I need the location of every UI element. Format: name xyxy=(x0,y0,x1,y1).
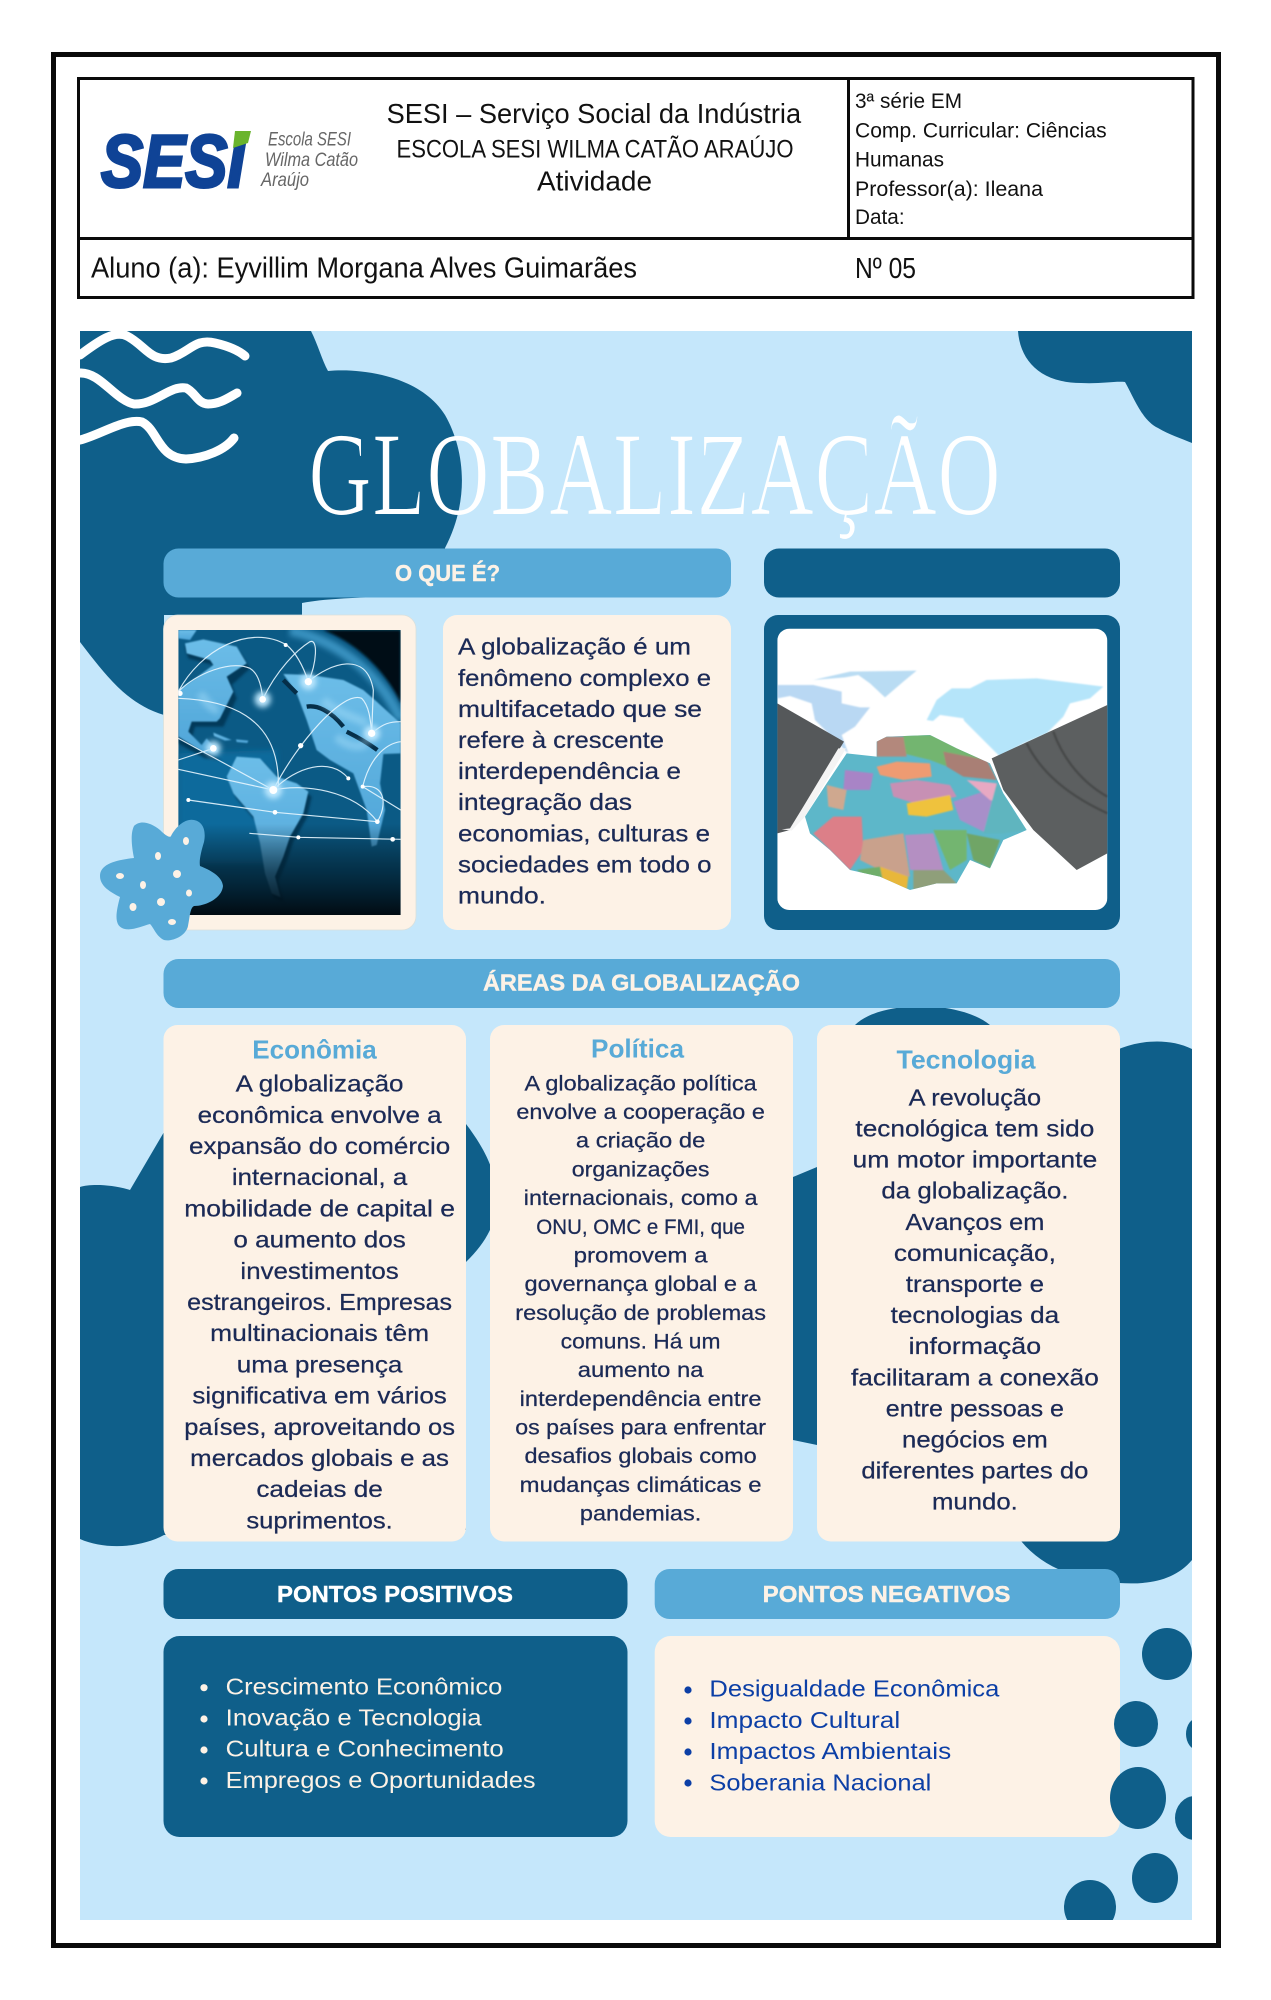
panel: positive points list: Empregos e Oportunidades xyxy=(226,1767,536,1793)
panel: positive points list: Crescimento Econômico xyxy=(226,1673,502,1699)
card text: tecnologia: informação xyxy=(909,1333,1041,1359)
card text: politica: aumento na xyxy=(578,1359,704,1382)
card text: politica: pandemias. xyxy=(580,1502,701,1526)
card text: economia: cadeias de xyxy=(256,1476,383,1502)
card: tecnologia xyxy=(817,1025,1120,1542)
heading: o que é xyxy=(164,548,731,598)
card text: economia: econômica envolve a xyxy=(198,1102,442,1128)
card text: politica: mudanças climáticas e xyxy=(520,1474,761,1497)
heading: pontos negativos: PONTOS NEGATIVOS xyxy=(763,1581,1010,1607)
card text: tecnologia: entre pessoas e xyxy=(886,1395,1064,1421)
card title: politica: Política xyxy=(591,1034,685,1064)
school title: SESI – Serviço Social da Indústria xyxy=(387,98,802,129)
class details: Comp. Curricular: Ciências xyxy=(855,120,1107,143)
panel: negative points list xyxy=(655,1636,1120,1837)
card text: politica: governança global e a xyxy=(524,1273,757,1296)
card text: tecnologia: tecnologias da xyxy=(891,1302,1059,1328)
SESI logo: SESI xyxy=(101,120,246,203)
school title: ESCOLA SESI WILMA CATÃO ARAÚJO xyxy=(396,135,794,164)
heading: pontos positivos xyxy=(164,1569,628,1619)
class details xyxy=(855,90,1107,229)
card text: politica: organizações xyxy=(572,1158,709,1181)
card title: economia: Econômia xyxy=(252,1035,377,1065)
card text: economia: investimentos xyxy=(240,1258,399,1284)
white wave decorations xyxy=(80,334,245,459)
student name: Aluno (a): Eyvillim Morgana Alves Guimarães xyxy=(91,253,637,285)
card: definition text xyxy=(443,615,731,930)
card: definition text: fenômeno complexo e xyxy=(458,665,711,691)
class details: 3ª série EM xyxy=(855,90,962,113)
card text: economia: internacional, a xyxy=(232,1164,407,1190)
card text: politica: A globalização política xyxy=(524,1072,757,1095)
card text: tecnologia: Avanços em xyxy=(905,1209,1044,1235)
card text: politica: comuns. Há um xyxy=(561,1330,720,1353)
card text: tecnologia: tecnológica tem sido xyxy=(855,1116,1094,1142)
card: definition text: sociedades em todo o xyxy=(458,851,712,877)
school title: Atividade xyxy=(537,166,652,197)
card text: tecnologia: facilitaram a conexão xyxy=(851,1364,1099,1390)
title: GLOBALIZAÇÃO xyxy=(308,409,1001,540)
heading: o que é: O QUE É? xyxy=(395,559,500,586)
card text: economia: significativa em vários xyxy=(192,1383,447,1409)
class details: Professor(a): Ileana xyxy=(855,178,1043,201)
card: economia xyxy=(164,1025,466,1542)
card text: tecnologia: um motor importante xyxy=(852,1147,1097,1173)
card text: economia: suprimentos. xyxy=(246,1507,393,1533)
card text: tecnologia: da globalização. xyxy=(881,1178,1068,1204)
card text: economia: mercados globais e as xyxy=(190,1445,449,1471)
panel: negative points list: Impacto Cultural xyxy=(709,1707,900,1733)
student number: Nº 05 xyxy=(855,253,916,285)
class details: Data: xyxy=(855,206,905,229)
card text: tecnologia: negócios em xyxy=(902,1426,1048,1452)
card text: economia: expansão do comércio xyxy=(189,1133,450,1159)
card text: economia: estrangeiros. Empresas xyxy=(187,1289,452,1315)
school title xyxy=(387,98,802,197)
card text: tecnologia xyxy=(851,1084,1099,1515)
card text: politica: resolução de problemas xyxy=(515,1302,766,1325)
SESI logo: Escola SESI xyxy=(268,130,352,150)
heading: áreas da globalização xyxy=(164,959,1120,1008)
card: globe picture xyxy=(164,615,416,930)
decorative dots xyxy=(1064,1628,1192,1920)
card text: economia: países, aproveitando os xyxy=(184,1414,455,1440)
decorative flower xyxy=(100,820,223,940)
card: definition text: interdependência e xyxy=(458,758,681,784)
card text: economia: uma presença xyxy=(237,1351,403,1377)
card text: politica: ONU, OMC e FMI, que xyxy=(536,1216,745,1239)
panel: negative points list: Soberania Nacional xyxy=(709,1769,931,1795)
card text: tecnologia: mundo. xyxy=(932,1489,1018,1515)
card text: politica: a criação de xyxy=(576,1130,705,1153)
heading: pontos negativos xyxy=(655,1569,1120,1619)
panel: negative points list: Desigualdade Econômica xyxy=(709,1676,1000,1702)
card text: economia: multinacionais têm xyxy=(210,1320,429,1346)
class details: Humanas xyxy=(855,149,944,172)
table frame xyxy=(78,78,1193,298)
card text: economia xyxy=(184,1071,455,1533)
card: definition text: A globalização é um xyxy=(458,634,691,660)
panel: positive points list: Inovação e Tecnologia xyxy=(226,1704,482,1730)
card: definition text: integração das xyxy=(458,789,632,815)
panel: positive points list xyxy=(164,1636,628,1837)
image: handshake painted with a world map xyxy=(777,629,1107,910)
school header table xyxy=(78,78,1193,298)
card: definition text: multifacetado que se xyxy=(458,696,702,722)
card text: politica: envolve a cooperação e xyxy=(516,1101,765,1124)
card text: economia: mobilidade de capital e xyxy=(184,1195,455,1221)
card text: politica: os países para enfrentar xyxy=(515,1416,766,1439)
card text: politica: promovem a xyxy=(574,1244,708,1267)
card text: politica: internacionais, como a xyxy=(524,1187,758,1210)
poster panel xyxy=(80,331,1215,1934)
card text: tecnologia: comunicação, xyxy=(894,1240,1056,1266)
card text: tecnologia: transporte e xyxy=(906,1271,1044,1297)
image: digital globe network xyxy=(177,630,401,915)
card text: politica: interdependência entre xyxy=(520,1388,761,1411)
panel: negative points list: Impactos Ambientais xyxy=(709,1738,951,1764)
empty dark heading bar xyxy=(764,548,1120,598)
card: definition text: economias, culturas e xyxy=(458,820,710,846)
card text: economia: A globalização xyxy=(236,1071,404,1097)
card: politica xyxy=(490,1025,793,1542)
card: definition text: mundo. xyxy=(458,882,546,908)
panel background xyxy=(80,331,1192,1920)
card title: tecnologia: Tecnologia xyxy=(896,1045,1036,1075)
SESI logo: Wilma Catão xyxy=(265,150,358,171)
panel: positive points list: Cultura e Conhecimento xyxy=(226,1736,504,1762)
card: handshake picture xyxy=(764,615,1120,930)
card text: politica: desafios globais como xyxy=(524,1445,757,1468)
heading: áreas da globalização: ÁREAS DA GLOBALIZAÇÃO xyxy=(483,969,800,996)
decorative blobs xyxy=(80,331,1192,1583)
card text: politica xyxy=(515,1072,766,1526)
card text: tecnologia: A revolução xyxy=(909,1084,1041,1110)
card: definition text: refere à crescente xyxy=(458,727,664,753)
heading: pontos positivos: PONTOS POSITIVOS xyxy=(277,1581,513,1607)
card text: tecnologia: diferentes partes do xyxy=(861,1458,1088,1484)
SESI logo xyxy=(101,120,358,203)
card text: economia: o aumento dos xyxy=(233,1227,406,1253)
SESI logo: Araújo xyxy=(260,170,309,191)
